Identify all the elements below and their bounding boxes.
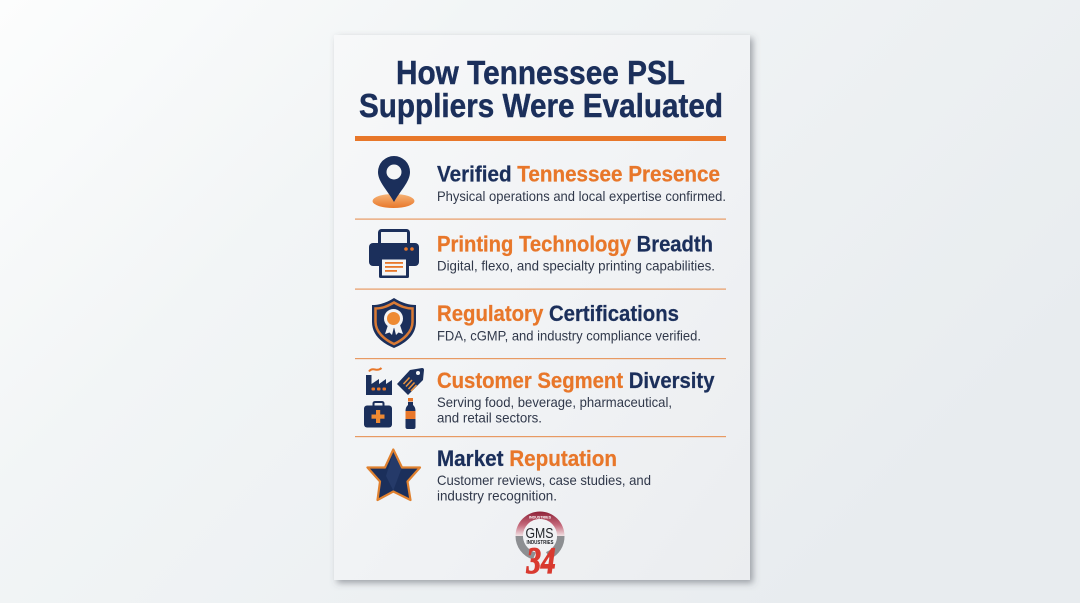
logo: GMS Industries 34: GMS (526, 526, 554, 542)
heading: verified Tennessee presence: Verified Tennessee Presence (437, 162, 720, 186)
description: market reputation: Customer reviews, case studies, and (437, 472, 651, 488)
title: How Tennessee PSL (396, 54, 685, 91)
criterion: printing technology breadth (369, 230, 715, 278)
criterion: regulatory certifications (372, 298, 701, 348)
title (359, 54, 723, 124)
heading: printing technology breadth: Printing Technology Breadth (437, 232, 713, 256)
heading: regulatory certifications: Regulatory Certifications (437, 301, 679, 326)
icon: map pin (372, 156, 414, 208)
heading: market reputation: Market Reputation (437, 446, 617, 471)
icon: price tag (397, 368, 424, 395)
title rule (355, 136, 726, 141)
icon: shield with rosette (372, 298, 416, 348)
description: printing technology breadth: Digital, flexo, and specialty printing capabilities. (437, 258, 715, 274)
logo: GMS Industries 34: INDUSTRIES (529, 514, 551, 520)
description: market reputation (437, 472, 651, 504)
logo: GMS Industries 34: INDUSTRIES (526, 540, 554, 546)
criterion: customer segment diversity (364, 368, 715, 429)
panel: poster (334, 35, 750, 580)
title: Suppliers Were Evaluated (359, 87, 723, 124)
description: verified Tennessee presence: Physical operations and local expertise confirmed. (437, 188, 726, 204)
description: customer segment diversity: Serving food, beverage, pharmaceutical, (437, 394, 672, 410)
logo: GMS Industries 34: 34 (526, 541, 556, 582)
description: customer segment diversity: and retail sectors. (437, 410, 542, 426)
icon: factory (366, 368, 392, 395)
icon: star (368, 450, 420, 500)
description: market reputation: industry recognition. (437, 488, 557, 504)
logo: GMS Industries 34 (516, 511, 565, 582)
heading: customer segment diversity: Customer Segment Diversity (437, 368, 715, 393)
description: regulatory certifications: FDA, cGMP, and industry compliance verified. (437, 328, 701, 344)
criterion: market reputation (368, 446, 651, 504)
criterion: verified Tennessee presence (372, 156, 726, 208)
description: customer segment diversity (437, 394, 672, 426)
icon: bottle (406, 398, 416, 429)
icon: printer (369, 230, 419, 278)
icon: medical kit (364, 402, 392, 428)
